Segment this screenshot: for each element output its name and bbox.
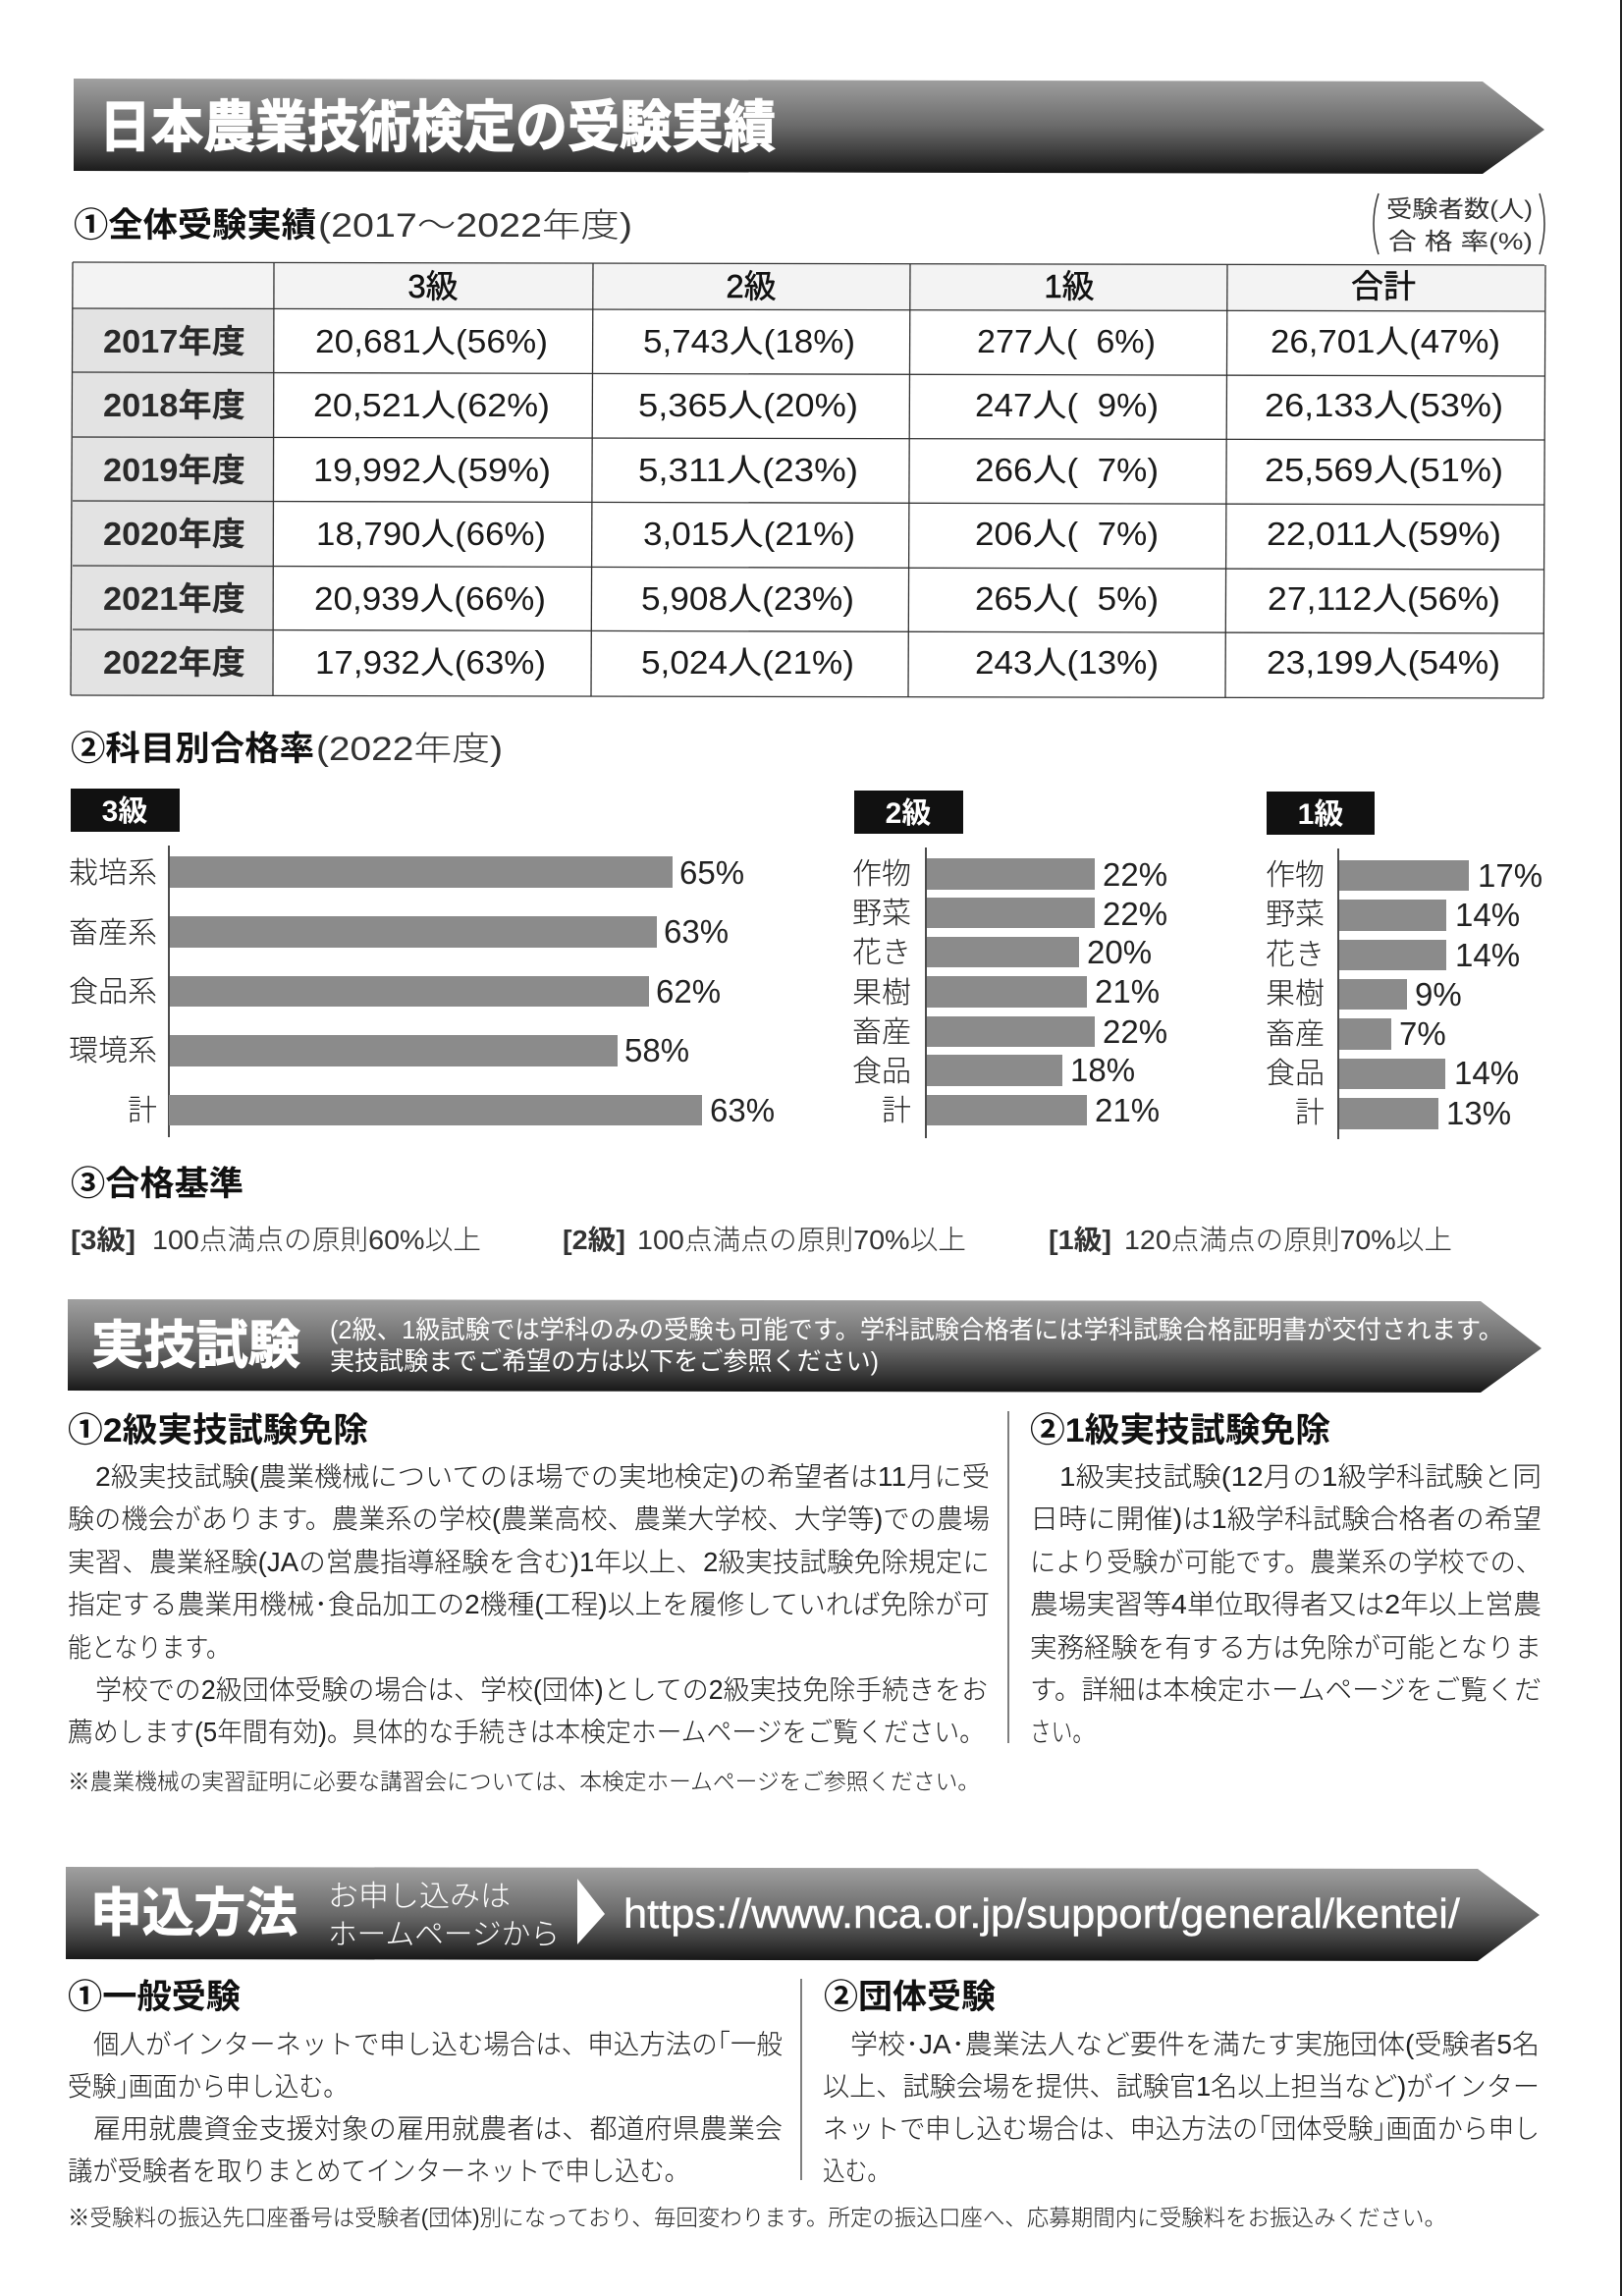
row 2018: 20,521人(62%): [313, 387, 550, 423]
section: group application: ②団体受験: [824, 1979, 997, 2016]
banner: how to apply: https://www.nca.or.jp/support/general/kentei/: [623, 1890, 1460, 1937]
bar chart: grade 1: 作物: [1266, 859, 1325, 892]
section: grade 1 practical exemption: [1030, 1412, 1542, 1747]
row 2017: 277人( 6%): [977, 323, 1156, 359]
bar chart: grade 3: 食品系: [69, 976, 157, 1009]
bar chart: grade 3: 63%: [710, 1092, 775, 1128]
bar chart: grade 3: 栽培系: [69, 857, 157, 890]
row 2018: 247人( 9%): [975, 387, 1159, 423]
section: individual application: ①一般受験: [68, 1979, 242, 2016]
row 2021: 265人( 5%): [975, 580, 1159, 617]
section heading: pass rate by subject: ②科目別合格率: [71, 731, 314, 768]
bar chart: grade 2: 20%: [1087, 934, 1152, 970]
text block: grade 2 exemption body: 2級実技試験(農業機械についてのほ場での実地検定)の希望者は11月に受: [95, 1461, 990, 1492]
table header row: 3級: [407, 268, 459, 304]
row 2019: 25,569人(51%): [1265, 452, 1503, 488]
bar chart: grade 2: 18%: [1070, 1052, 1135, 1088]
bar chart: grade 2: 花き: [852, 937, 911, 969]
text: pass criteria by grade: 100点満点の原則60%以上: [152, 1225, 481, 1255]
section: group application: [823, 1979, 1540, 2186]
banner: practical exam: 実技試験までご希望の方は以下をご参照ください): [330, 1346, 879, 1376]
row 2017: [103, 323, 1500, 359]
bar chart: grade 1: 17%: [1478, 857, 1542, 894]
row 2020: 2020年度: [103, 516, 245, 552]
text block: group application body: 込む。: [823, 2156, 890, 2186]
banner: practical exam: (2級、1級試験では学科のみの受験も可能です。学科試験合格者には学科試験合格証明書が交付されます。: [330, 1315, 1503, 1344]
text block: individual application body: 雇用就農資金支援対象の雇用就農者は、都道府県農業会: [93, 2113, 783, 2144]
row 2021: 5,908人(23%): [641, 580, 854, 617]
bar chart: grade 2: 計: [882, 1095, 911, 1127]
text block: grade 2 exemption body: 能となります。: [68, 1632, 230, 1663]
banner: how to apply: [66, 1867, 1540, 1961]
row 2019: 19,992人(59%): [313, 452, 551, 488]
text: pass criteria by grade: [1級]: [1049, 1225, 1111, 1255]
row 2022: 23,199人(54%): [1267, 644, 1500, 681]
text block: group application body: [823, 2029, 1540, 2186]
banner: how to apply: ホームページから: [328, 1919, 560, 1951]
badge: grade 2: 2級: [886, 797, 931, 830]
table header row: 2級: [726, 268, 777, 304]
row 2021: 2021年度: [103, 580, 245, 617]
row 2020: [103, 516, 1501, 552]
row 2017: 2017年度: [103, 323, 245, 359]
row 2020: 206人( 7%): [975, 516, 1159, 552]
row 2018: 26,133人(53%): [1265, 387, 1503, 423]
row 2021: [103, 580, 1500, 617]
legend: unit note: 合 格 率(%): [1388, 229, 1533, 255]
bar chart: grade 1: [1266, 792, 1542, 1139]
badge: grade 3: [71, 789, 180, 832]
banner: how to apply: お申し込みは: [328, 1881, 511, 1913]
text block: grade 1 exemption body: 1級実技試験(12月の1級学科試験と同: [1059, 1461, 1542, 1492]
bar chart: grade 3: 63%: [664, 913, 729, 950]
row 2019: 266人( 7%): [975, 452, 1159, 488]
text block: grade 2 exemption body: 実習、農業経験(JAの営農指導経験を含む)1年以上、2級実技試験免除規定に: [68, 1547, 990, 1577]
table header row: 1級: [1044, 268, 1095, 304]
bar chart: grade 1: 13%: [1446, 1095, 1511, 1131]
row 2018: 5,365人(20%): [638, 387, 858, 423]
text block: individual application body: 議が受験者を取りまとめてインターネットで申し込む。: [68, 2156, 689, 2186]
text block: grade 1 exemption body: さい。: [1030, 1717, 1094, 1747]
text: pass criteria by grade: [2級]: [563, 1225, 625, 1255]
row 2018: [103, 387, 1503, 423]
text block: grade 1 exemption body: 農場実習等4単位取得者又は2年以上営農: [1030, 1589, 1542, 1619]
legend: unit note: 受験者数(人): [1386, 196, 1533, 223]
row 2020: 3,015人(21%): [643, 516, 855, 552]
legend: unit note: [1374, 193, 1544, 255]
bar chart: grade 1: 果樹: [1266, 978, 1325, 1011]
text block: grade 2 exemption body: 験の機会があります。農業系の学校(農業高校、農業大学校、大学等)での農場: [68, 1503, 990, 1534]
row 2021: 20,939人(66%): [314, 580, 546, 617]
text: pass criteria by grade: 120点満点の原則70%以上: [1124, 1225, 1452, 1255]
row 2020: 18,790人(66%): [316, 516, 546, 552]
bar chart: grade 1: 9%: [1415, 976, 1462, 1012]
footnote: training course: ※農業機械の実習証明に必要な講習会については、本検定ホームページをご参照ください。: [68, 1769, 980, 1794]
bar chart: grade 2: 22%: [1103, 856, 1167, 893]
bar chart: grade 3: 62%: [656, 973, 721, 1010]
banner: exam results title: 日本農業技術検定の受験実績: [99, 96, 776, 159]
banner: exam results title: [74, 79, 1544, 174]
section heading: pass criteria: ③合格基準: [71, 1166, 243, 1203]
bar chart: grade 1: 計: [1295, 1097, 1325, 1129]
section heading: pass rate by subject: [71, 731, 503, 768]
bar chart: grade 2: 畜産: [852, 1016, 911, 1049]
text block: group application body: 学校･JA･農業法人など要件を満たす実施団体(受験者5名: [850, 2029, 1540, 2059]
bar chart: grade 2: 野菜: [852, 898, 911, 930]
bar chart: grade 3: 畜産系: [69, 917, 157, 950]
table: overall results 2017-2022: [71, 262, 1545, 698]
text block: grade 1 exemption body: 日時に開催)は1級学科試験合格者の希望: [1030, 1503, 1542, 1534]
text block: individual application body: 個人がインターネットで申し込む場合は、申込方法の｢一般: [93, 2029, 783, 2059]
bar chart: grade 1: 7%: [1399, 1015, 1446, 1052]
row 2017: 26,701人(47%): [1271, 323, 1500, 359]
bar chart: grade 2: 食品: [852, 1056, 911, 1088]
bar chart: grade 2: 21%: [1095, 1092, 1160, 1128]
bar chart: grade 3: 65%: [679, 854, 744, 891]
text block: group application body: ネットで申し込む場合は、申込方法の｢団体受験｣画面から申し: [823, 2113, 1540, 2144]
text block: grade 2 exemption body: 指定する農業用機械･食品加工の2機種(工程)以上を履修していれば免除が可: [68, 1589, 990, 1619]
row 2019: [103, 452, 1503, 488]
bar chart: grade 3: 58%: [624, 1032, 689, 1068]
table header row: [407, 268, 1416, 304]
badge: grade 3: 3級: [102, 795, 147, 828]
row 2019: 5,311人(23%): [638, 452, 858, 488]
badge: grade 1: [1267, 792, 1375, 835]
section: grade 2 practical exemption: ①2級実技試験免除: [68, 1412, 368, 1449]
bar chart: grade 1: 花き: [1266, 939, 1325, 971]
row 2022: 2022年度: [103, 644, 245, 681]
banner: practical exam: [68, 1299, 1542, 1393]
bar chart: grade 3: 環境系: [69, 1035, 157, 1067]
bar chart: grade 2: [852, 791, 1167, 1138]
text block: grade 2 exemption body: [68, 1461, 990, 1747]
text block: grade 1 exemption body: により受験が可能です。農業系の学校での、: [1030, 1547, 1542, 1577]
section heading: overall results: ①全体受験実績: [74, 207, 316, 245]
bar chart: grade 2: 果樹: [852, 977, 911, 1010]
text: pass criteria by grade: [3級]: [71, 1225, 135, 1255]
row 2022: 17,932人(63%): [315, 644, 546, 681]
bar chart: grade 2: 22%: [1103, 1013, 1167, 1050]
row 2022: [103, 644, 1500, 681]
text block: individual application body: [68, 2029, 783, 2186]
row 2019: 2019年度: [103, 452, 245, 488]
text: pass criteria by grade: 100点満点の原則70%以上: [637, 1225, 966, 1255]
bar chart: grade 2: 作物: [852, 858, 911, 891]
bar chart: grade 1: 畜産: [1266, 1018, 1325, 1051]
row 2017: 20,681人(56%): [315, 323, 548, 359]
bar chart: grade 2: 21%: [1095, 973, 1160, 1010]
badge: grade 2: [854, 791, 963, 834]
row 2022: 5,024人(21%): [641, 644, 854, 681]
bar chart: grade 1: 野菜: [1266, 899, 1325, 931]
row 2020: 22,011人(59%): [1267, 516, 1501, 552]
row 2018: 2018年度: [103, 387, 245, 423]
bar chart: grade 1: 14%: [1455, 937, 1520, 973]
bar chart: grade 3: 計: [128, 1095, 157, 1127]
text block: grade 1 exemption body: す。詳細は本検定ホームページをご覧くだ: [1030, 1674, 1542, 1705]
text block: grade 2 exemption body: 薦めします(5年間有効)。具体的な手続きは本検定ホームページをご覧ください。: [68, 1717, 985, 1747]
table header row: 合計: [1351, 268, 1416, 304]
banner: how to apply: 申込方法: [90, 1885, 298, 1942]
section: grade 2 practical exemption: [68, 1412, 990, 1747]
text block: grade 2 exemption body: 学校での2級団体受験の場合は、学校(団体)としての2級実技免除手続きをお: [95, 1674, 988, 1705]
section heading: pass rate by subject: (2022年度): [316, 731, 503, 768]
footnote: payment: ※受験料の振込先口座番号は受験者(団体)別になっており、毎回変わります。所定の振込口座へ、応募期間内に受験料をお振込みください。: [68, 2205, 1446, 2230]
bar chart: grade 1: 14%: [1455, 897, 1520, 933]
banner: practical exam: 実技試験: [91, 1317, 300, 1375]
text: pass criteria by grade: [71, 1225, 1452, 1255]
section: grade 1 practical exemption: ②1級実技試験免除: [1030, 1412, 1330, 1449]
bar chart: grade 3: [69, 789, 775, 1137]
text block: individual application body: 受験｣画面から申し込む。: [68, 2071, 348, 2102]
bar chart: grade 1: 食品: [1266, 1058, 1325, 1090]
row 2021: 27,112人(56%): [1268, 580, 1500, 617]
text block: grade 1 exemption body: [1030, 1461, 1542, 1747]
row 2022: 243人(13%): [975, 644, 1159, 681]
text block: group application body: 以上、試験会場を提供、試験官1名以上担当など)がインター: [823, 2071, 1540, 2102]
bar chart: grade 2: 22%: [1103, 896, 1167, 932]
text block: grade 1 exemption body: 実務経験を有する方は免除が可能となりま: [1030, 1632, 1542, 1663]
badge: grade 1: 1級: [1298, 798, 1343, 831]
row 2017: 5,743人(18%): [643, 323, 855, 359]
section: individual application: [68, 1979, 783, 2186]
section heading: overall results: (2017～2022年度): [318, 207, 632, 245]
bar chart: grade 1: 14%: [1454, 1055, 1519, 1091]
arrow: to url: [577, 1879, 605, 1944]
section heading: overall results: [74, 207, 632, 245]
